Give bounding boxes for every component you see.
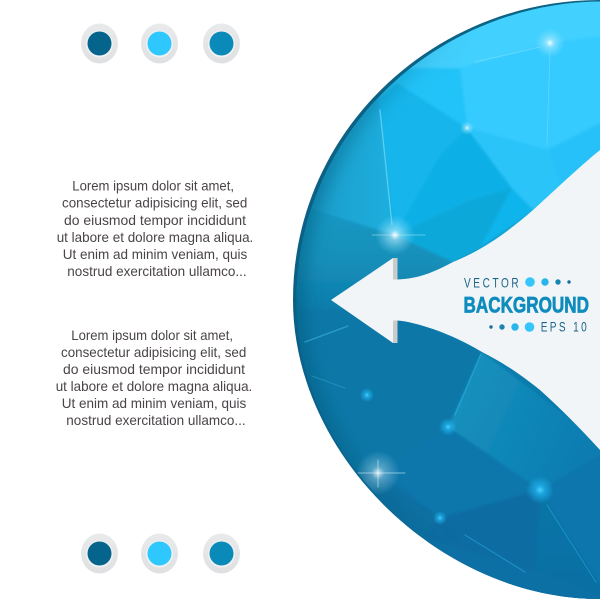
text block 1: Lorem ipsum dolor sit amet,	[72, 178, 234, 194]
inner edge shading	[296, 49, 438, 506]
faceted blue circle	[285, 0, 600, 600]
text block 1	[57, 178, 253, 279]
text block 1: Ut enim ad minim veniam, quis	[63, 247, 247, 262]
heading: vector	[464, 275, 571, 291]
text block 2: Ut enim ad minim veniam, quis	[62, 396, 246, 411]
arrow head fold	[393, 258, 398, 343]
text block 1: consectetur adipisicing elit, sed	[62, 196, 247, 211]
text block 1: do eiusmod tempor incididunt	[64, 213, 246, 228]
text block 2: nostrud exercitation ullamco...	[66, 413, 246, 428]
light flares	[537, 30, 563, 56]
text block 1: nostrud exercitation ullamco...	[67, 264, 247, 279]
text block 2: ut labore et dolore magna aliqua.	[56, 379, 252, 394]
text block 2: consectetur adipisicing elit, sed	[61, 345, 246, 360]
white arrow banner	[331, 150, 600, 450]
text block 2: Lorem ipsum dolor sit amet,	[71, 328, 233, 343]
text block 2: do eiusmod tempor incididunt	[63, 362, 245, 377]
top dot buttons	[81, 24, 240, 64]
heading: vector: VECTOR	[464, 275, 519, 291]
bottom dot buttons	[81, 534, 240, 574]
text block 1: ut labore et dolore magna aliqua.	[57, 230, 253, 245]
text block 2	[56, 328, 252, 428]
heading: eps 10: EPS 10	[541, 319, 587, 335]
heading: eps 10	[489, 319, 587, 335]
light streaks	[305, 47, 596, 582]
